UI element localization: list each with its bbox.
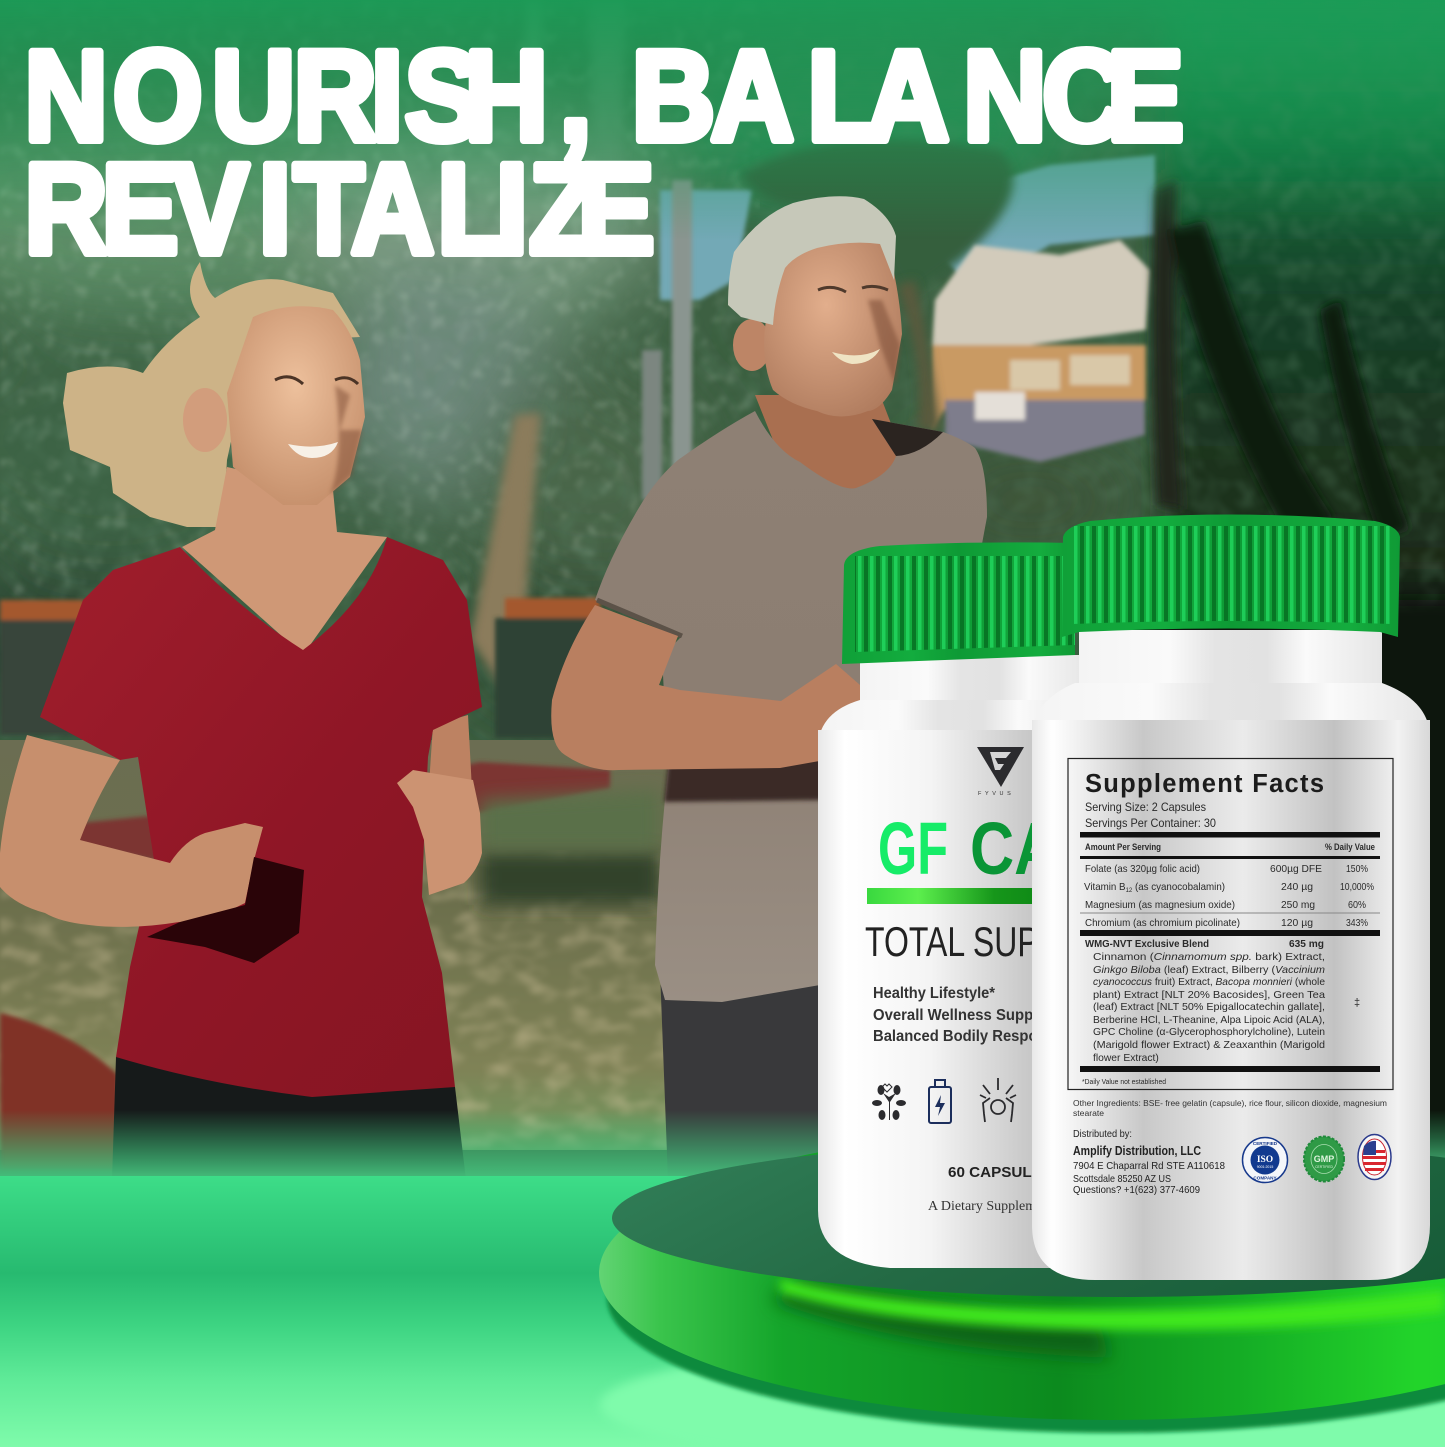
title line one: NOURISH, BALANCE <box>24 24 1184 167</box>
woman: red t-shirt <box>40 537 482 1097</box>
proprietary blend: flower Extract) <box>1093 1053 1159 1064</box>
badge: ISO certified: 9001:2015 <box>1257 1165 1273 1169</box>
title <box>24 24 1184 280</box>
sky patches <box>660 155 1155 300</box>
woman: right fist <box>397 770 482 895</box>
dark tree shadow right of bottles <box>1100 600 1445 1160</box>
tree trunks and lamp posts <box>470 0 1410 693</box>
back bottle: cap <box>842 542 1075 664</box>
badge: GMP certified: CERTIFIED <box>1315 1165 1333 1169</box>
man: sleeve hem <box>597 600 682 636</box>
woman: eyes <box>275 377 358 384</box>
proprietary blend: Ginkgo Biloba (leaf) Extract, Bilberry ( Vaccinium <box>1093 965 1325 976</box>
grass bank <box>480 790 660 850</box>
ground texture <box>0 850 700 1150</box>
badge: ISO certified <box>1242 1138 1288 1182</box>
icon: battery <box>929 1080 951 1123</box>
back bottle: benefits list: Balanced Bodily Response <box>873 1028 1063 1045</box>
man: smile <box>832 349 880 364</box>
nutrient rows: 240 µg <box>1281 881 1313 893</box>
back bottle: dietary supplement line: A Dietary Supplement <box>928 1199 1053 1214</box>
distributor details <box>1073 1128 1225 1196</box>
woman: smile <box>288 442 338 458</box>
man: face <box>764 231 902 416</box>
other ingredients <box>1073 1098 1387 1118</box>
proprietary blend: plant) Extract [NLT 20% Bacosides], Green Tea <box>1093 990 1325 1001</box>
distant building <box>932 240 1150 462</box>
podium: dark band on side <box>770 1280 1110 1358</box>
nutrient rows: Chromium (as chromium picolinate) <box>1085 917 1240 929</box>
floor fade <box>0 1110 1445 1176</box>
nutrient rows: 600µg DFE <box>1270 863 1322 875</box>
foliage texture <box>0 0 1445 740</box>
man: face shadow by nose <box>868 300 900 385</box>
nutrient rows: 250 mg <box>1281 899 1315 911</box>
back bottle: fyvus logo: FYVUS <box>978 791 1014 797</box>
badge: USA flag <box>1358 1134 1391 1180</box>
back bottle: subtitle: TOTAL SUPPORT <box>865 918 1127 965</box>
proprietary blend: (leaf) Extract [NLT 50% Epigallocatechin gallate], <box>1093 1002 1325 1013</box>
proprietary blend: 635 mg <box>1289 939 1324 950</box>
serving info: Serving Size: 2 Capsules <box>1085 800 1206 814</box>
panel border <box>1068 758 1393 1090</box>
woman: left arm <box>0 735 263 927</box>
nutrient rows: 343% <box>1346 917 1368 929</box>
man: shirt shadow under arm <box>664 755 830 802</box>
panel title: Supplement Facts <box>1085 770 1324 798</box>
back bottle: product name GF: GF <box>878 807 948 890</box>
back bottle: shoulder <box>818 700 1085 745</box>
woman: shadow of fist on shirt <box>147 857 304 963</box>
nutrient rows: (as cyanocobalamin) <box>1132 881 1225 893</box>
column headers: Amount Per Serving <box>1085 842 1161 852</box>
proprietary blend: cyanococcus fruit) Extract, Bacopa monnieri (whole <box>1093 977 1325 988</box>
distributor details: Scottsdale 85250 AZ US <box>1073 1173 1171 1185</box>
front bottle: body <box>1032 720 1430 1280</box>
badge: ISO certified: CERTIFIED <box>1253 1141 1278 1146</box>
other ingredients: Other Ingredients: BSE- free gelatin (capsule), rice flour, silicon dioxide, magnesium <box>1073 1098 1387 1108</box>
nutrient rows: 120 µg <box>1281 917 1313 929</box>
title line two: REVITALIZE <box>24 137 655 280</box>
lamp posts <box>642 180 692 500</box>
back bottle: fyvus logo <box>977 747 1024 797</box>
back bottle: body <box>818 730 1085 1268</box>
right side dark foliage <box>1165 0 1445 680</box>
running track, far <box>60 762 610 860</box>
front bottle: shoulder <box>1032 683 1430 735</box>
nutrient rows: 60% <box>1348 899 1366 911</box>
woman: face <box>227 306 365 505</box>
panel footnote: *Daily Value not established <box>1082 1079 1166 1086</box>
back bottle: neck <box>860 655 1085 710</box>
proprietary blend <box>1085 939 1360 1064</box>
man: eyes <box>818 286 888 292</box>
distributor details: Distributed by: <box>1073 1128 1132 1140</box>
column headers <box>1085 842 1375 852</box>
column headers: % Daily Value <box>1325 842 1375 852</box>
distributor details: 7904 E Chaparral Rd STE A110618 <box>1073 1160 1225 1172</box>
nutrient rows: 150% <box>1346 863 1368 875</box>
woman jogging <box>0 262 482 1180</box>
icon: wellness tree <box>872 1084 906 1120</box>
running track, near <box>0 1013 118 1170</box>
badge: GMP certified: GMP <box>1314 1154 1334 1164</box>
front bottle: cap <box>1062 514 1400 637</box>
podium <box>599 1126 1445 1447</box>
badge: GMP certified <box>1304 1136 1344 1182</box>
man: t-shirt <box>595 411 987 1002</box>
nutrient rows: Vitamin B <box>1084 881 1129 893</box>
fence <box>0 598 605 738</box>
man jogging <box>551 196 987 1180</box>
serving info: Servings Per Container: 30 <box>1085 816 1216 830</box>
back bottle: product name CAPS: CAPS <box>970 807 1140 890</box>
top green glow <box>0 0 1445 240</box>
proprietary blend: WMG-NVT Exclusive Blend <box>1085 939 1209 950</box>
back bottle: benefits list: Overall Wellness Support <box>873 1007 1053 1024</box>
leaf highlights <box>0 0 760 620</box>
podium: top surface <box>612 1139 1445 1297</box>
podium: contact shadow <box>607 1163 1445 1433</box>
proprietary blend: ‡ <box>1354 997 1360 1009</box>
proprietary blend: GPC Choline (α-Glycerophosphorylcholine), Lutein <box>1093 1027 1325 1038</box>
woman: trousers <box>112 1057 466 1180</box>
other ingredients: stearate <box>1073 1108 1104 1118</box>
front bottle: neck <box>1079 630 1382 690</box>
icon: hands and energy <box>980 1078 1016 1122</box>
woman: right arm <box>428 715 472 800</box>
man: arm and hand <box>551 605 862 770</box>
serving info <box>1085 800 1216 830</box>
supplement facts panel <box>1068 758 1393 1090</box>
proprietary blend: Berberine HCl, L-Theanine, Alpa Lipoic Acid (ALA), <box>1093 1015 1325 1026</box>
podium: rim highlight <box>780 1278 1445 1330</box>
distributor details: Amplify Distribution, LLC <box>1073 1144 1201 1158</box>
man: ear <box>733 319 771 371</box>
woman: hair <box>63 262 360 527</box>
woman: neck and chest <box>182 467 387 655</box>
front bottle <box>1032 514 1430 1280</box>
back bottle: benefits list: Healthy Lifestyle* <box>873 985 996 1002</box>
man: hair <box>728 196 896 325</box>
back bottle <box>818 542 1140 1268</box>
back bottle: green bar <box>867 888 1037 904</box>
woman: ear <box>183 388 227 452</box>
ground <box>0 740 1100 1150</box>
man: trousers <box>660 970 825 1180</box>
back bottle: benefits list <box>873 985 1063 1045</box>
back bottle: capsule count: 60 CAPSULES <box>948 1164 1052 1181</box>
nutrient rows: Magnesium (as magnesium oxide) <box>1085 899 1235 911</box>
nutrient rows: 12 <box>1126 887 1133 894</box>
man: neck <box>755 395 905 500</box>
badge: ISO certified: COMPANY <box>1253 1176 1277 1180</box>
nutrient rows <box>1080 863 1380 929</box>
podium: floor reflection <box>600 1335 1445 1447</box>
distributor details: Questions? +1(623) 377-4609 <box>1073 1184 1200 1196</box>
green floor <box>0 1176 1445 1447</box>
proprietary blend: (Marigold flower Extract) & Zeaxanthin (Marigold <box>1093 1040 1325 1051</box>
tree crown over the sky <box>740 139 1013 300</box>
man: collar shadow <box>872 419 943 456</box>
nutrient rows: 10,000% <box>1340 881 1374 893</box>
woman: face shadow by nose <box>330 385 362 495</box>
proprietary blend: Cinnamon ( Cinnamomum spp. bark) Extract, <box>1093 952 1325 963</box>
badge: ISO certified: ISO <box>1257 1155 1273 1165</box>
nutrient rows: Folate (as 320µg folic acid) <box>1085 863 1200 875</box>
podium: side <box>599 1126 1445 1420</box>
tree shadow on grass <box>480 850 660 905</box>
